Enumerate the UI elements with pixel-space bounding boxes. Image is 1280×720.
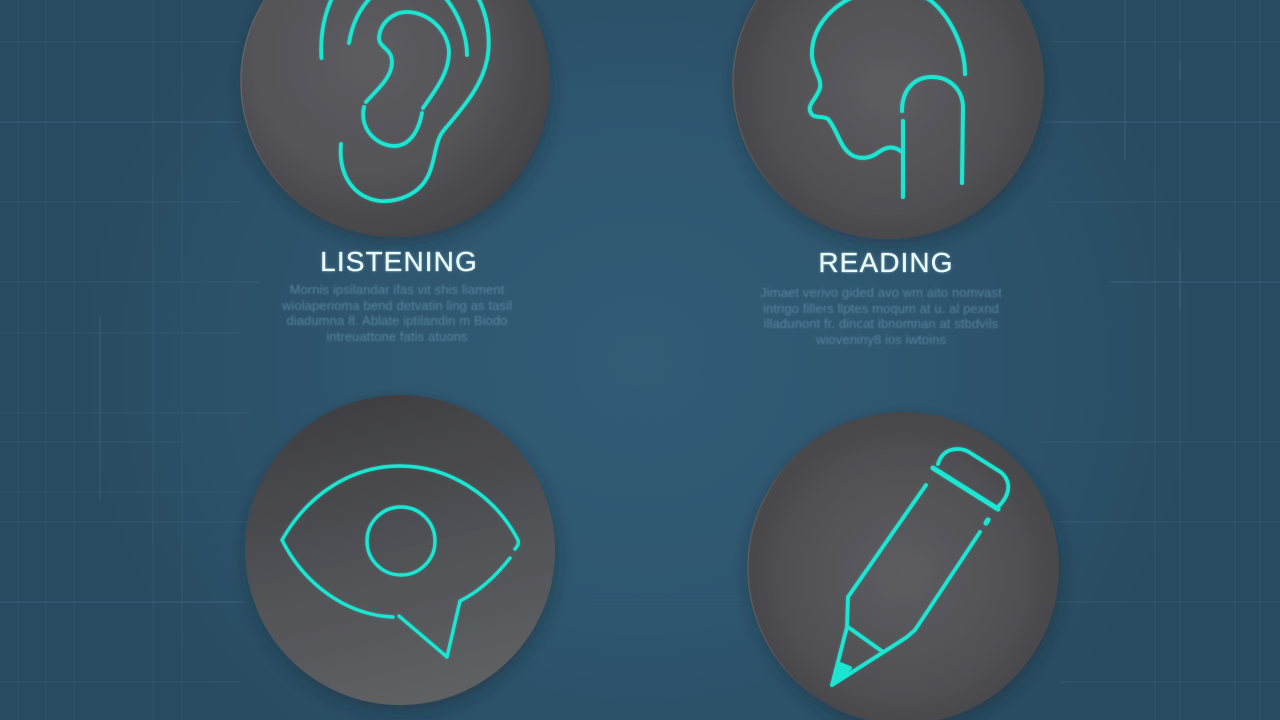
text block: listening description bbox=[282, 282, 512, 344]
text block: listening description: diadumna 8. Ablate iptilandin m Biodo bbox=[286, 313, 508, 328]
icon: ear (listening) bbox=[240, 0, 550, 237]
text block: listening description: intreuattone fatis atuons bbox=[326, 329, 468, 344]
text block: reading description: Jimaet verivo gided avo wm aito nomvast bbox=[760, 285, 1002, 300]
text block: listening description: wiolaperioma bend detvatin ling as tasil bbox=[282, 298, 512, 313]
icon: pencil (writing) bbox=[747, 412, 1059, 720]
text block: reading description: intrigo fillers llptes moqum at u. al pexnd bbox=[763, 301, 999, 316]
text block: listening description: Mornis ipsilandar ifas vit shis liament bbox=[290, 282, 504, 297]
text block: reading description: wioveniny8 ios iwtoins bbox=[816, 332, 946, 347]
heading: listening: LISTENING bbox=[320, 246, 478, 277]
icon: head with finger (reading) bbox=[732, 0, 1044, 239]
icon: eye speech bubble (speaking) bbox=[245, 395, 555, 705]
text block: reading description: illadunont fr. dincat ibnomnan at stbdvils bbox=[764, 316, 998, 331]
text block: reading description bbox=[760, 285, 1002, 347]
heading: reading: READING bbox=[818, 247, 954, 278]
